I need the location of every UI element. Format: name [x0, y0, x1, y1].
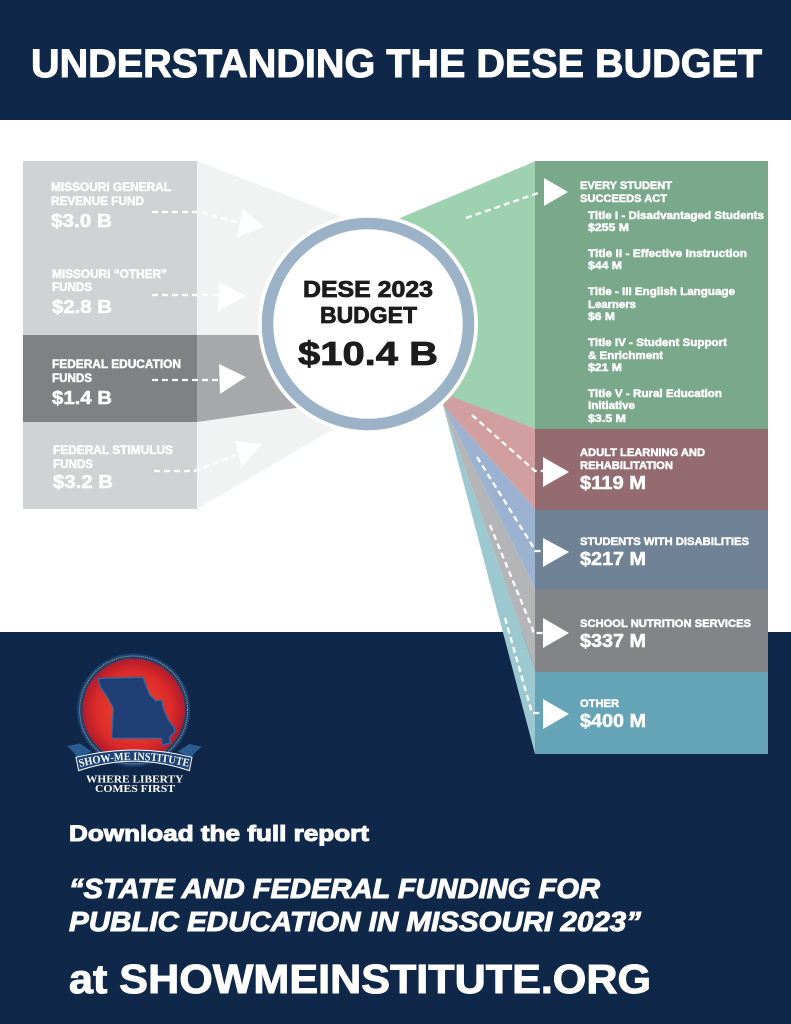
panel: school nutrition services — [535, 590, 768, 672]
panel: federal stimulus funds: FEDERAL STIMULUS — [53, 445, 173, 457]
panel: federal education funds: FEDERAL EDUCATION — [52, 359, 181, 371]
panel: Missouri general revenue fund: $3.0 B — [51, 211, 112, 231]
panel: Every Student Succeeds Act: Learners — [588, 299, 636, 311]
budget circle — [258, 214, 478, 434]
panel: Every Student Succeeds Act: $3.5 M — [588, 413, 626, 425]
panel: other: $400 M — [580, 711, 646, 731]
arrow: other funds to budget — [152, 282, 246, 311]
panel: Missouri general revenue fund: MISSOURI GENERAL — [51, 182, 171, 194]
funnel: spending categories out of the budget circle — [400, 161, 536, 754]
panel: Every Student Succeeds Act: $255 M — [588, 222, 629, 234]
panel: school nutrition services: $337 M — [580, 631, 646, 651]
panel: Every Student Succeeds Act: EVERY STUDENT — [580, 180, 672, 192]
logo tagline — [86, 774, 184, 795]
arrow: to Every Student Succeeds Act — [466, 178, 568, 218]
panel: Every Student Succeeds Act: Title - III English Language — [588, 286, 735, 298]
logo: Show-Me Institute — [68, 653, 202, 795]
circle label: BUDGET — [320, 302, 417, 328]
header band — [0, 0, 791, 120]
panel: Missouri general revenue fund: REVENUE FUND — [51, 196, 144, 208]
panel: Missouri other funds — [23, 249, 197, 335]
website: at SHOWMEINSTITUTE.ORG — [69, 956, 651, 1002]
panel: other: OTHER — [580, 698, 619, 710]
panel: federal education funds: $1.4 B — [52, 388, 112, 408]
panel: students with disabilities: STUDENTS WITH DISABILITIES — [580, 536, 749, 548]
report title: PUBLIC EDUCATION IN MISSOURI 2023” — [69, 906, 641, 937]
download text: Download the full report — [69, 821, 370, 846]
funnel: revenue sources into the budget circle — [197, 161, 340, 509]
panel: Every Student Succeeds Act: $44 M — [588, 260, 622, 272]
panel: Every Student Succeeds Act — [535, 161, 768, 429]
circle label — [298, 276, 438, 372]
arrow: to students with disabilities — [477, 457, 569, 567]
arrow: to other — [505, 618, 569, 729]
banner ribbon — [68, 743, 202, 772]
panel: federal education funds: FUNDS — [52, 373, 92, 385]
panel: federal stimulus funds — [23, 422, 197, 509]
panel: Missouri general revenue fund — [23, 161, 197, 249]
panel: Missouri other funds: MISSOURI “OTHER” — [52, 269, 167, 281]
panel: Every Student Succeeds Act: Title I - Disadvantaged Students — [588, 210, 764, 222]
banner ribbon: SHOW-ME INSTITUTE — [78, 752, 190, 767]
panel: Every Student Succeeds Act: & Enrichment — [588, 350, 663, 362]
panel: Every Student Succeeds Act: $21 M — [588, 362, 622, 374]
icon: Missouri outline — [98, 677, 175, 745]
panel: Every Student Succeeds Act: Title IV - Student Support — [588, 337, 727, 349]
circle label: $10.4 B — [298, 335, 438, 372]
arrow: federal education to budget — [152, 364, 246, 394]
panel: Every Student Succeeds Act: Initiative — [588, 400, 635, 412]
arrow: general revenue to budget — [152, 209, 264, 237]
circle label: DESE 2023 — [303, 276, 433, 302]
panel: students with disabilities: $217 M — [580, 549, 646, 569]
panel: Every Student Succeeds Act: Title V - Rural Education — [588, 388, 722, 400]
title: UNDERSTANDING THE DESE BUDGET — [31, 42, 762, 86]
panel: adult learning and rehabilitation: REHABILITATION — [580, 460, 673, 472]
arrow: to school nutrition — [490, 525, 569, 648]
panel: Every Student Succeeds Act: Title II - Effective Instruction — [588, 248, 747, 260]
panel: other — [535, 672, 768, 754]
panel: adult learning and rehabilitation: $119 M — [580, 473, 646, 493]
panel: federal education funds — [23, 335, 197, 422]
panel: students with disabilities — [535, 510, 768, 590]
footer band — [0, 632, 791, 1024]
panel: federal stimulus funds: $3.2 B — [53, 472, 113, 492]
arrow: stimulus to budget — [154, 441, 262, 471]
report title: “STATE AND FEDERAL FUNDING FOR — [69, 873, 601, 904]
panel: school nutrition services: SCHOOL NUTRITION SERVICES — [580, 618, 751, 630]
panel: Missouri other funds: $2.8 B — [52, 297, 112, 317]
panel: adult learning and rehabilitation: ADULT LEARNING AND — [580, 447, 705, 459]
panel: Every Student Succeeds Act: SUCCEEDS ACT — [580, 193, 667, 205]
panel: federal stimulus funds: FUNDS — [53, 459, 93, 471]
logo tagline: WHERE LIBERTY — [86, 774, 184, 785]
arrow: to adult learning — [472, 415, 569, 487]
logo tagline: COMES FIRST — [95, 784, 175, 795]
report title — [69, 873, 641, 937]
panel: adult learning and rehabilitation — [535, 429, 768, 510]
panel: Every Student Succeeds Act: $6 M — [588, 311, 615, 323]
panel: Missouri other funds: FUNDS — [52, 282, 92, 294]
